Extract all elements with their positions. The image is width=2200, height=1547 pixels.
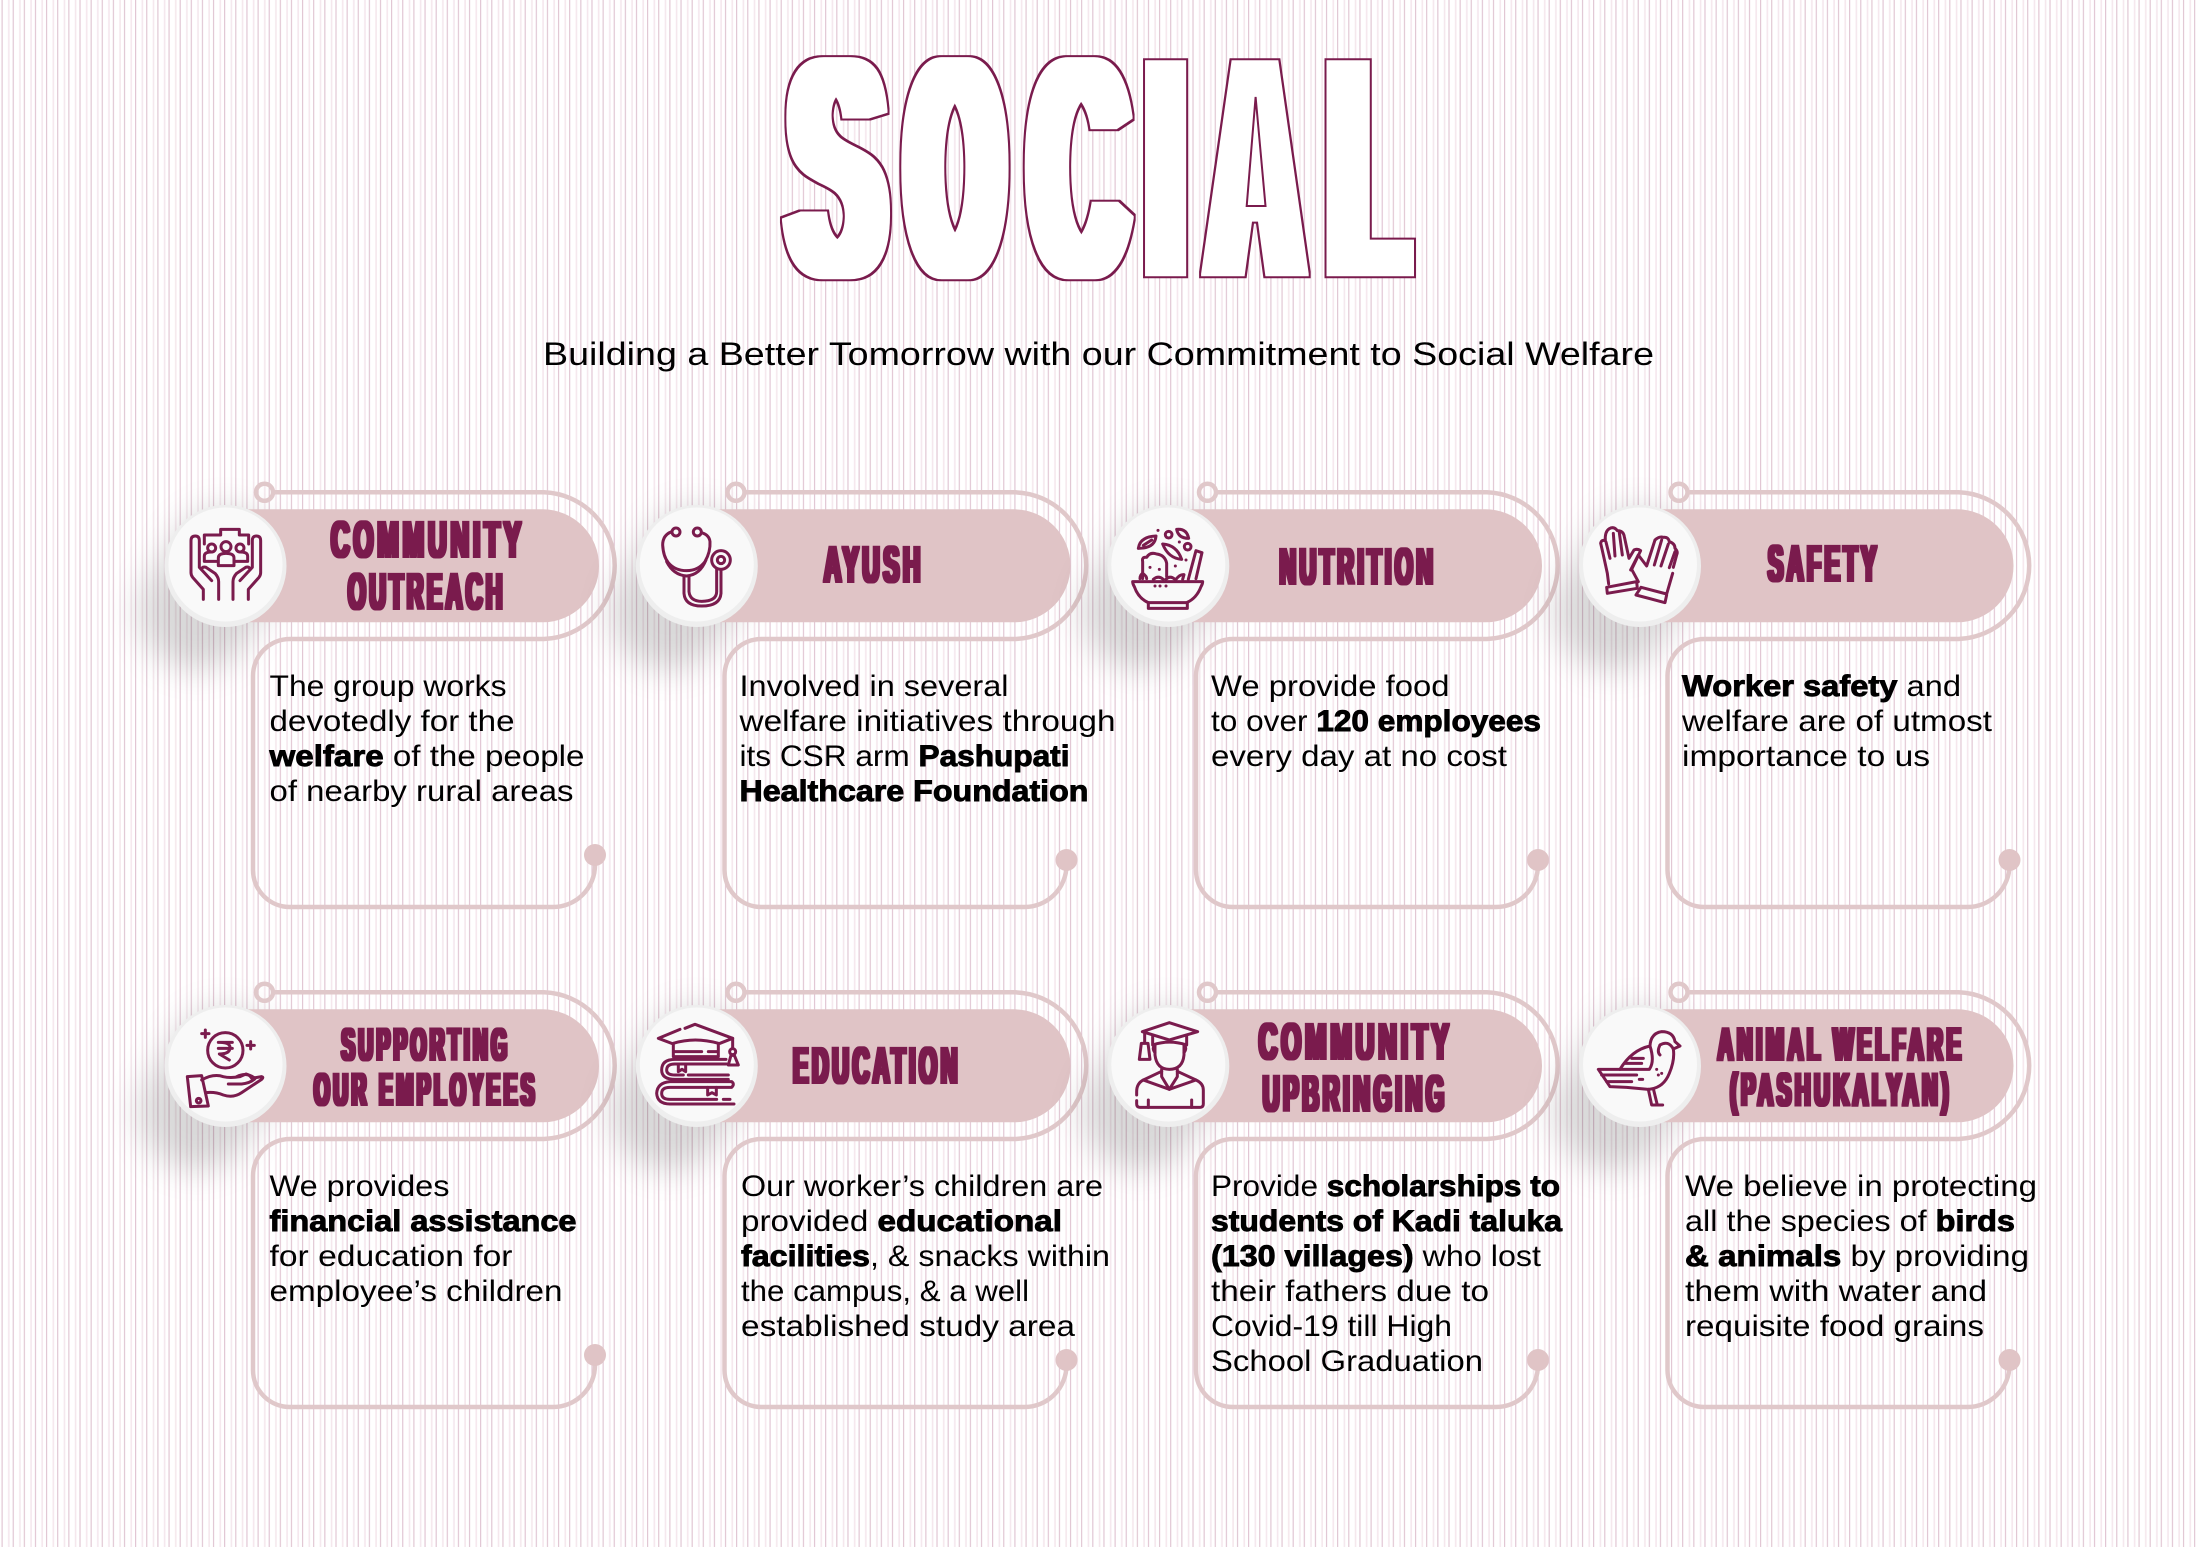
circle shadow (1612, 1066, 1640, 1112)
body text: students of Kadi taluka (1211, 1205, 1562, 1238)
heading pill (696, 1009, 1070, 1122)
body text: established study area (741, 1310, 1075, 1343)
card: education (636, 984, 1110, 1407)
icon disc (636, 505, 758, 627)
icon disc (164, 1005, 286, 1127)
icon disc (164, 505, 286, 627)
icon disc (1107, 1005, 1229, 1127)
icon disc (636, 1005, 758, 1127)
title (791, 0, 1405, 341)
body text: for education for (270, 1240, 513, 1273)
title: C (1032, 0, 1124, 341)
icon: bird (1598, 1032, 1680, 1105)
circle shadow (1612, 566, 1640, 612)
heading pill (225, 509, 599, 622)
body text: employee’s children (270, 1275, 562, 1308)
body text (741, 1170, 1110, 1343)
body text: welfare of the people (268, 740, 584, 773)
circle shadow (668, 566, 696, 612)
title: S (791, 0, 882, 341)
body text: & animals by providing (1685, 1240, 2029, 1273)
card: nutrition (1107, 484, 1558, 907)
body text: requisite food grains (1685, 1310, 1984, 1343)
card: ayush: AYUSH (824, 536, 924, 593)
body text: them with water and (1685, 1275, 1987, 1308)
connector end dot (1998, 849, 2020, 871)
body text: (130 villages) who lost (1211, 1240, 1542, 1273)
card: animal welfare: (PASHUKALYAN) (1730, 1064, 1952, 1116)
icon: gloves (1601, 528, 1677, 603)
circle shadow (1140, 1066, 1168, 1112)
body text (738, 670, 1116, 808)
connector outline (724, 984, 1086, 1407)
heading pill (696, 509, 1070, 622)
body text: School Graduation (1211, 1345, 1483, 1378)
body text: the campus, & a well (741, 1275, 1029, 1308)
heading: COMMUNITY (331, 511, 525, 568)
heading pill (1640, 1009, 2014, 1122)
heading: SUPPORTING (342, 1019, 510, 1070)
icon disc (1579, 1005, 1701, 1127)
card: safety: SAFETY (1768, 535, 1880, 592)
body text: all the species of birds (1685, 1205, 2015, 1238)
connector outline (724, 484, 1086, 907)
body text: Involved in several (740, 670, 1008, 703)
icon: hands holding community (191, 529, 261, 599)
card: education: EDUCATION (793, 1037, 961, 1094)
title: I (1151, 0, 1180, 341)
body text: Our worker’s children are (741, 1170, 1103, 1203)
card: safety (1579, 484, 2029, 907)
body text (1681, 670, 1993, 773)
body text (1211, 1170, 1562, 1378)
heading: OUTREACH (348, 563, 506, 620)
connector outline (1196, 484, 1558, 907)
card: community outreach (164, 484, 615, 907)
heading pill (1640, 509, 2014, 622)
heading: COMMUNITY (1259, 1013, 1453, 1070)
card: community upbringing: UPBRINGING (1263, 1065, 1448, 1122)
title: O (910, 0, 1001, 341)
connector outline (253, 484, 615, 907)
body text: provided educational (741, 1205, 1062, 1238)
subtitle: Building a Better Tomorrow with our Commitment to Social Welfare (543, 336, 1654, 372)
card: supporting our employees: OUR EMPLOYEES (314, 1064, 538, 1115)
card: supporting our employees (164, 984, 615, 1407)
body text: importance to us (1682, 740, 1930, 773)
heading pill (1168, 1009, 1542, 1122)
body text: every day at no cost (1211, 740, 1508, 773)
title: A (1211, 0, 1299, 341)
body text: to over 120 employees (1211, 705, 1541, 738)
connector end dot (584, 844, 606, 866)
body text (268, 670, 584, 808)
title: L (1332, 0, 1405, 341)
connector outline (1196, 984, 1558, 1407)
card: ayush (636, 484, 1116, 907)
icon disc (1107, 505, 1229, 627)
connector outline (253, 984, 615, 1407)
body text (1685, 1170, 2037, 1343)
body text: The group works (270, 670, 506, 703)
icon: books and graduation cap (657, 1024, 738, 1104)
body text: Covid-19 till High (1211, 1310, 1452, 1343)
connector end dot (1056, 1349, 1078, 1371)
body text (270, 1170, 576, 1308)
body text: their fathers due to (1211, 1275, 1489, 1308)
body text: devotedly for the (270, 705, 514, 738)
connector end dot (1527, 849, 1549, 871)
connector end dot (584, 1344, 606, 1366)
connector outline (1668, 484, 2029, 907)
card: nutrition: NUTRITION (1280, 538, 1436, 595)
card: animal welfare (1579, 984, 2037, 1407)
body text: its CSR arm Pashupati (740, 740, 1070, 773)
icon disc (1579, 505, 1701, 627)
connector end dot (1998, 1349, 2020, 1371)
circle shadow (1140, 566, 1168, 612)
icon: rupee over hand (187, 1030, 263, 1107)
body text: Provide scholarships to (1211, 1170, 1560, 1203)
circle shadow (197, 1066, 225, 1112)
body text: We provide food (1211, 670, 1450, 703)
body text (1211, 670, 1541, 773)
body text: financial assistance (270, 1205, 576, 1238)
connector end dot (1527, 1349, 1549, 1371)
body text: welfare are of utmost (1681, 705, 1993, 738)
card: community upbringing (1107, 984, 1562, 1407)
body text: facilities , & snacks within (741, 1240, 1110, 1273)
body text: Worker safety and (1682, 670, 1961, 703)
connector outline (1668, 984, 2029, 1407)
body text: We believe in protecting (1685, 1170, 2037, 1203)
body text: of nearby rural areas (270, 775, 574, 808)
heading pill (1168, 509, 1542, 622)
heading pill (225, 1009, 599, 1122)
circle shadow (197, 566, 225, 612)
body text: welfare initiatives through (738, 705, 1116, 738)
body text: Healthcare Foundation (740, 775, 1088, 808)
icon: stethoscope (663, 528, 730, 606)
icon: graduate (1137, 1023, 1203, 1107)
circle shadow (668, 1066, 696, 1112)
icon: salad bowl (1133, 529, 1203, 608)
body text: We provides (270, 1170, 450, 1203)
connector end dot (1056, 849, 1078, 871)
